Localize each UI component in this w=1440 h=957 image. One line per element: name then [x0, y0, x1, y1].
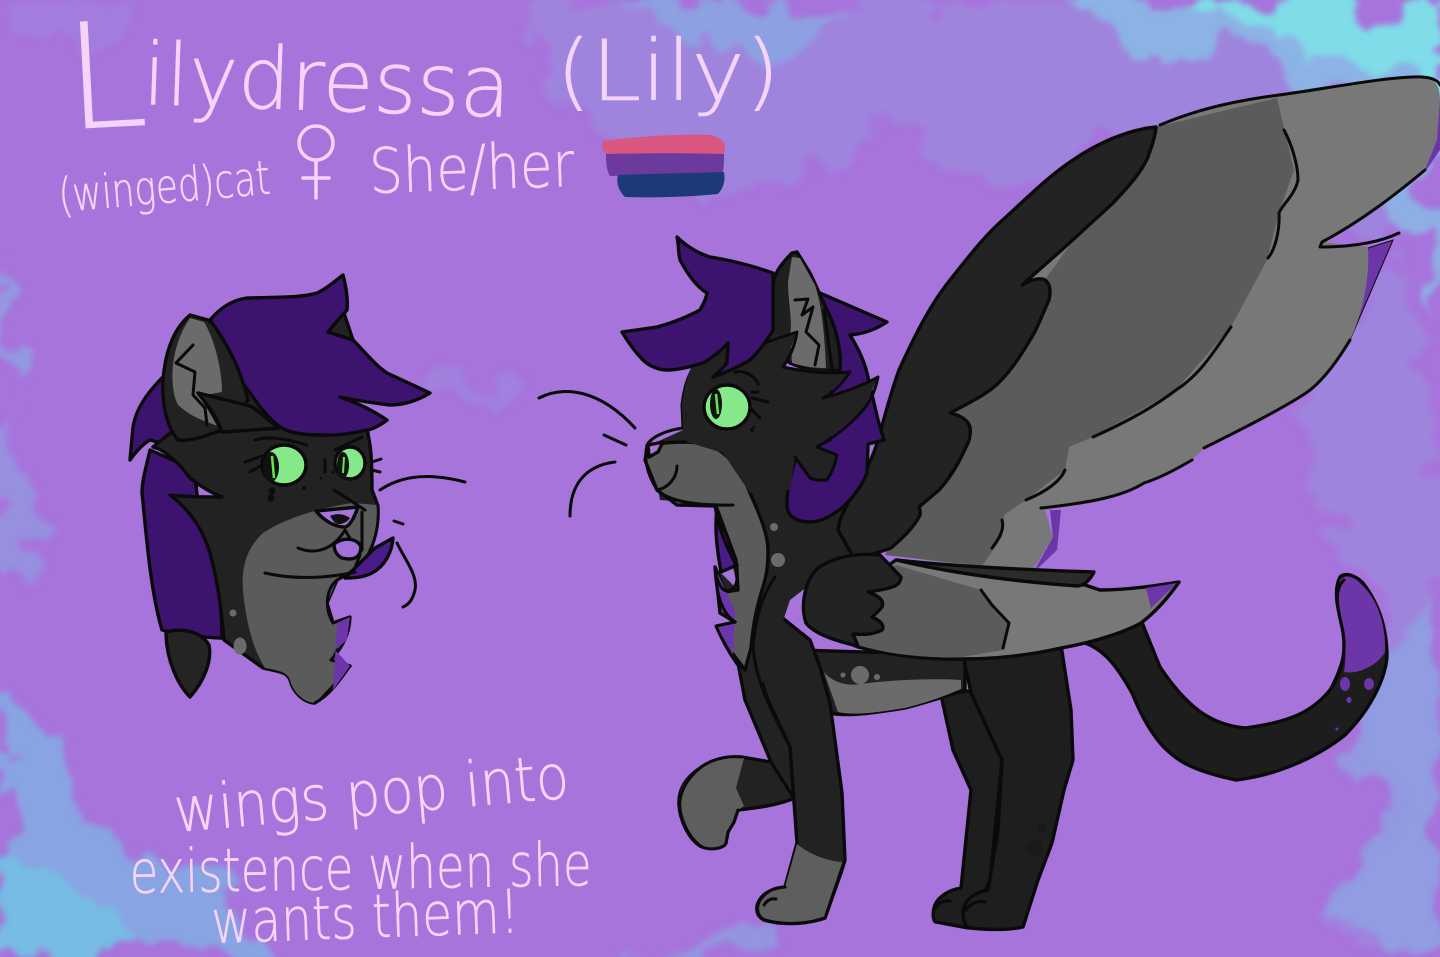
neck outline — [315, 505, 378, 703]
purple fur accent — [333, 617, 350, 690]
left eye — [262, 445, 306, 485]
ear — [766, 252, 840, 371]
face and neck base — [153, 380, 378, 703]
gray bib — [645, 442, 768, 670]
ear — [163, 315, 248, 440]
title nickname: (Lily) — [556, 22, 780, 120]
far front leg — [738, 650, 800, 800]
small wing top feather — [896, 560, 1094, 586]
note: wings pop into existence — [129, 740, 592, 957]
belly — [760, 650, 965, 715]
chest and neck — [650, 380, 880, 690]
title: Lilydressa (Lily) — [61, 0, 780, 164]
belly spots — [840, 666, 880, 684]
nose — [648, 442, 663, 457]
fringe hair — [622, 237, 773, 377]
title name: ilydressa — [141, 25, 513, 138]
wing purple edges — [1350, 240, 1393, 340]
note line 1: wings pop into — [171, 740, 572, 847]
toe lines — [936, 901, 985, 910]
chest purple fur — [716, 570, 735, 655]
whiskers: full body cat — [539, 392, 635, 516]
ear inner gray — [788, 257, 826, 368]
rear hair — [787, 293, 887, 522]
mouth lines — [265, 512, 362, 577]
body front line — [753, 577, 790, 747]
neck spots — [230, 610, 246, 654]
freckles — [268, 470, 334, 502]
ear inner — [172, 318, 222, 428]
eye — [704, 385, 750, 429]
fur tuft over ear — [198, 393, 280, 432]
freckles — [685, 415, 756, 441]
head portrait cat — [130, 275, 430, 703]
ear lobe under hair — [166, 630, 210, 697]
small wing — [803, 554, 1179, 659]
leg spots — [1026, 823, 1047, 856]
note line 2: existence when she — [129, 830, 592, 908]
tail purple tip — [1338, 577, 1385, 673]
far back leg — [933, 690, 1002, 928]
head fur outline — [767, 332, 878, 480]
tongue — [334, 539, 361, 559]
wing light gray — [840, 77, 1440, 570]
hair notch — [328, 313, 353, 340]
wing outlines — [992, 77, 1440, 548]
long hair — [142, 450, 222, 638]
raised front leg — [679, 745, 795, 849]
note line 3: wants them! — [210, 877, 520, 957]
lashes and brow — [735, 372, 768, 418]
near back leg — [962, 645, 1073, 929]
whiskers: head cat — [380, 477, 465, 607]
shoulder feathers — [803, 554, 901, 646]
gray neck and muzzle — [243, 503, 378, 703]
tail spots — [1336, 677, 1374, 730]
small wing gray — [811, 560, 1179, 659]
gray sock — [759, 844, 844, 922]
neck spots — [770, 523, 785, 567]
big wing — [838, 77, 1440, 573]
wing dark gray — [885, 98, 1294, 566]
wing black feathers — [838, 127, 1156, 560]
icon: female symbol — [299, 126, 333, 198]
small wing dark gray — [830, 565, 1009, 657]
pronouns: She/her — [368, 128, 576, 208]
full body cat — [622, 77, 1440, 929]
right eye — [335, 447, 365, 479]
purple cheek — [345, 538, 393, 578]
bisexual pride flag — [602, 135, 725, 197]
nose and teeth — [316, 507, 358, 527]
back hair left — [130, 377, 175, 460]
ear detail lines — [176, 345, 207, 425]
small wing feather line — [981, 590, 1009, 648]
brows and lashes — [245, 437, 381, 510]
throat purple — [716, 510, 737, 572]
small wing purple tip — [1146, 583, 1177, 608]
muzzle outline — [646, 370, 740, 668]
species label: (winged)cat — [56, 151, 272, 224]
top hair — [210, 275, 430, 435]
ear detail lines — [795, 299, 832, 368]
tail — [1085, 575, 1387, 780]
near front leg — [750, 600, 845, 924]
head fur — [682, 332, 878, 493]
